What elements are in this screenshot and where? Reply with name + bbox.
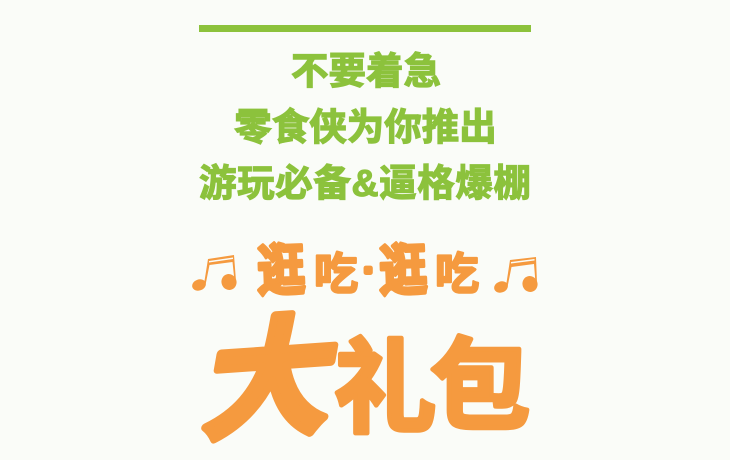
subtitle: orange 逛吃·逛吃: 逛 bbox=[256, 240, 306, 304]
subtitle: orange 逛吃·逛吃 bbox=[256, 240, 479, 304]
icon: left music note bbox=[191, 255, 239, 293]
subtitle: orange 逛吃·逛吃: 吃 bbox=[435, 250, 479, 299]
green top bar bbox=[199, 25, 531, 32]
title glyph 大: 大 bbox=[195, 303, 349, 457]
title glyph 包: 包 bbox=[430, 331, 530, 443]
heading line 2: 零食侠为你推出 bbox=[234, 106, 497, 148]
heading line 1: 不要着急 bbox=[291, 50, 441, 92]
heading line 3: 游玩必备&逼格爆棚 bbox=[199, 162, 531, 204]
subtitle: orange 逛吃·逛吃: 逛 bbox=[378, 240, 428, 304]
icon: right music note bbox=[493, 257, 540, 295]
title glyph 礼: 礼 bbox=[334, 332, 436, 446]
main title: orange 大礼包 bbox=[195, 303, 530, 457]
heading: green three-line message bbox=[199, 50, 531, 204]
subtitle: orange 逛吃·逛吃: · bbox=[364, 254, 374, 287]
subtitle: orange 逛吃·逛吃: 吃 bbox=[314, 250, 358, 299]
